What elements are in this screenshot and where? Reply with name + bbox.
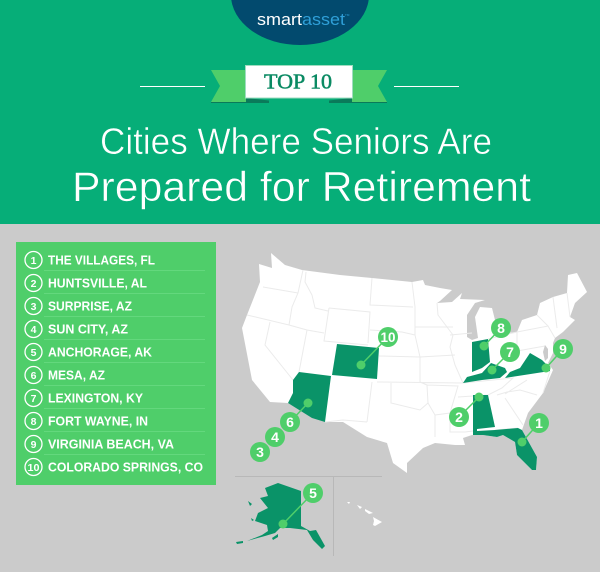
panel: ranked list: SURPRISE, AZ	[48, 300, 132, 314]
title: Cities Where Seniors Are	[100, 121, 492, 162]
panel: ranked list: MESA, AZ	[48, 368, 105, 382]
panel: ranked list: 8	[31, 416, 37, 428]
logo: smartasset: smart	[257, 10, 302, 29]
highlighted states	[288, 339, 550, 470]
logo: smartasset	[231, 0, 369, 45]
panel: ranked list	[16, 242, 216, 485]
panel: ranked list: 7	[31, 393, 37, 405]
panel: ranked list: 5	[31, 347, 37, 359]
map markers: 1	[535, 415, 543, 431]
map markers: 5	[309, 485, 317, 501]
ribbon: top 10: TOP 10	[264, 70, 332, 94]
panel: ranked list: ANCHORAGE, AK	[48, 346, 152, 360]
panel: ranked list: 9	[31, 439, 37, 451]
map: Hawaii	[347, 502, 382, 526]
title	[72, 121, 531, 210]
map markers	[250, 318, 573, 528]
inset dividers	[235, 476, 382, 556]
panel: ranked list: 10	[28, 462, 40, 474]
ribbon: top 10	[211, 66, 387, 103]
header band	[0, 0, 600, 224]
panel: ranked list: 4	[31, 324, 37, 336]
map markers: 9	[559, 341, 567, 357]
panel: ranked list: 3	[31, 301, 37, 313]
map: Alaska	[236, 483, 325, 549]
map markers: 2	[455, 409, 463, 425]
panel: ranked list: LEXINGTON, KY	[48, 392, 144, 406]
map markers: 8	[497, 320, 505, 336]
ribbon side rules	[140, 86, 459, 88]
logo: smartasset: asset	[302, 10, 345, 29]
panel: ranked list: HUNTSVILLE, AL	[48, 276, 147, 290]
panel: ranked list: SUN CITY, AZ	[48, 322, 128, 336]
panel: ranked list: FORT WAYNE, IN	[48, 414, 148, 428]
title: Prepared for Retirement	[72, 163, 531, 210]
map markers: 3	[256, 444, 264, 460]
map markers: 10	[380, 329, 396, 345]
panel: ranked list: 6	[31, 370, 37, 382]
panel: ranked list: 1	[31, 255, 37, 267]
map markers: 4	[271, 429, 279, 445]
logo: smartasset: TM	[345, 13, 350, 17]
map: contiguous United States	[242, 253, 587, 473]
panel: ranked list: VIRGINIA BEACH, VA	[48, 438, 174, 452]
map markers: 7	[506, 344, 514, 360]
panel: ranked list: 2	[31, 278, 37, 290]
map markers: 6	[286, 414, 294, 430]
panel: ranked list: THE VILLAGES, FL	[48, 254, 155, 268]
panel: ranked list: COLORADO SPRINGS, CO	[48, 460, 203, 474]
